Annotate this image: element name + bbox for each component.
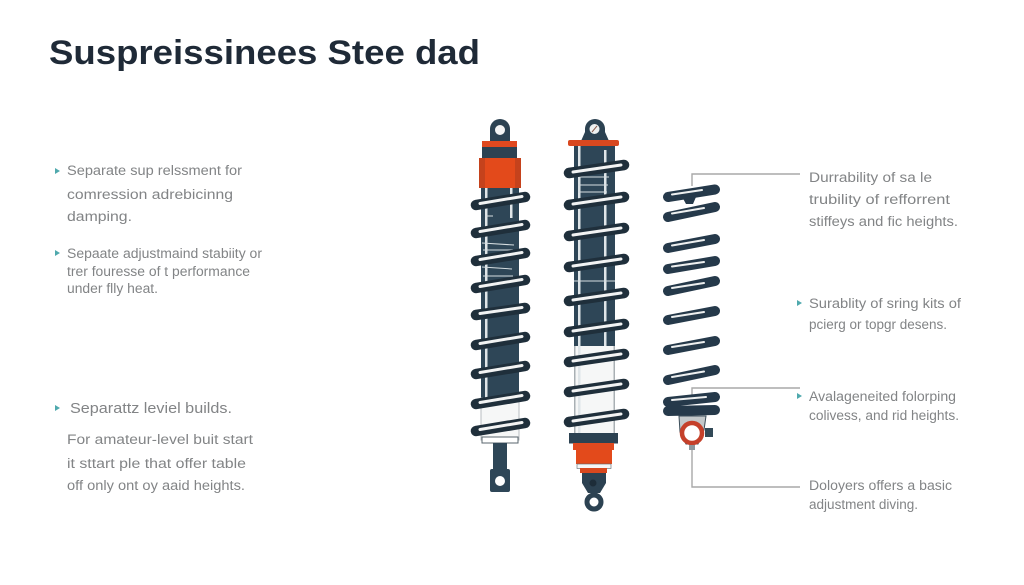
text: compression damping: Separate sup relssment for <box>67 163 243 178</box>
text: stability: Sepaate adjustmaind stabiity or <box>67 246 263 261</box>
text <box>809 296 961 332</box>
text: compression damping <box>67 163 243 224</box>
text: stability <box>67 246 263 296</box>
bottom rod and mount <box>490 443 510 492</box>
text: colivess, and rid heights. <box>809 408 959 423</box>
text block: spring kits <box>797 296 961 332</box>
left shock absorber <box>476 119 525 492</box>
spring mount <box>679 416 713 450</box>
spring coils <box>668 190 715 411</box>
coil spring <box>476 196 525 431</box>
top mount eye <box>490 119 510 142</box>
text block: basic adjustment: Doloyers offers a basic <box>809 478 952 493</box>
body text: off only ont oy aaid heights. <box>67 478 245 493</box>
text: stability: trer fouresse of t performance <box>67 264 250 279</box>
title: Suspreissinees Stee dad <box>49 34 480 72</box>
bullet <box>55 168 60 174</box>
body text: it sttart ple that offer table <box>67 456 246 471</box>
loose coil spring <box>668 190 715 450</box>
text: stiffness: stiffeys and fic heights. <box>809 214 958 229</box>
text block: durability: Durrability of sa le <box>809 170 932 185</box>
bottom collar and mount <box>569 433 618 509</box>
text: Surablity of sring kits of <box>809 296 961 311</box>
red flange <box>568 140 619 146</box>
bullet <box>797 300 802 306</box>
top red collar <box>479 141 521 188</box>
body text: For amateur-level buit start <box>67 432 253 447</box>
text <box>809 389 959 423</box>
text block: available coilovers <box>797 389 959 423</box>
text block: basic adjustment: adjustment diving. <box>809 497 918 512</box>
text: compression damping: damping. <box>67 209 132 224</box>
text: compression damping: comression adrebicinng <box>67 187 233 202</box>
right shock absorber <box>568 119 624 509</box>
text block: level builds <box>55 400 253 493</box>
leader lines <box>692 174 800 487</box>
coil spring <box>569 165 624 422</box>
bullet <box>55 405 60 411</box>
top mount eye <box>581 119 609 141</box>
text: pcierg or topgr desens. <box>809 317 947 332</box>
text block: basic adjustment <box>809 478 952 512</box>
text: stability: under flly heat. <box>67 281 158 296</box>
bullet <box>797 393 802 399</box>
shock body <box>481 188 519 443</box>
subheading: Separattz leviel builds. <box>70 400 232 417</box>
bullet <box>55 250 60 256</box>
shock body <box>574 146 615 434</box>
text: Avalageneited folorping <box>809 389 956 404</box>
text block: damping adjustment <box>55 163 263 296</box>
body text <box>67 432 253 493</box>
text: stiffness <box>809 192 958 229</box>
text: stiffness: trubility of refforrent <box>809 192 950 207</box>
